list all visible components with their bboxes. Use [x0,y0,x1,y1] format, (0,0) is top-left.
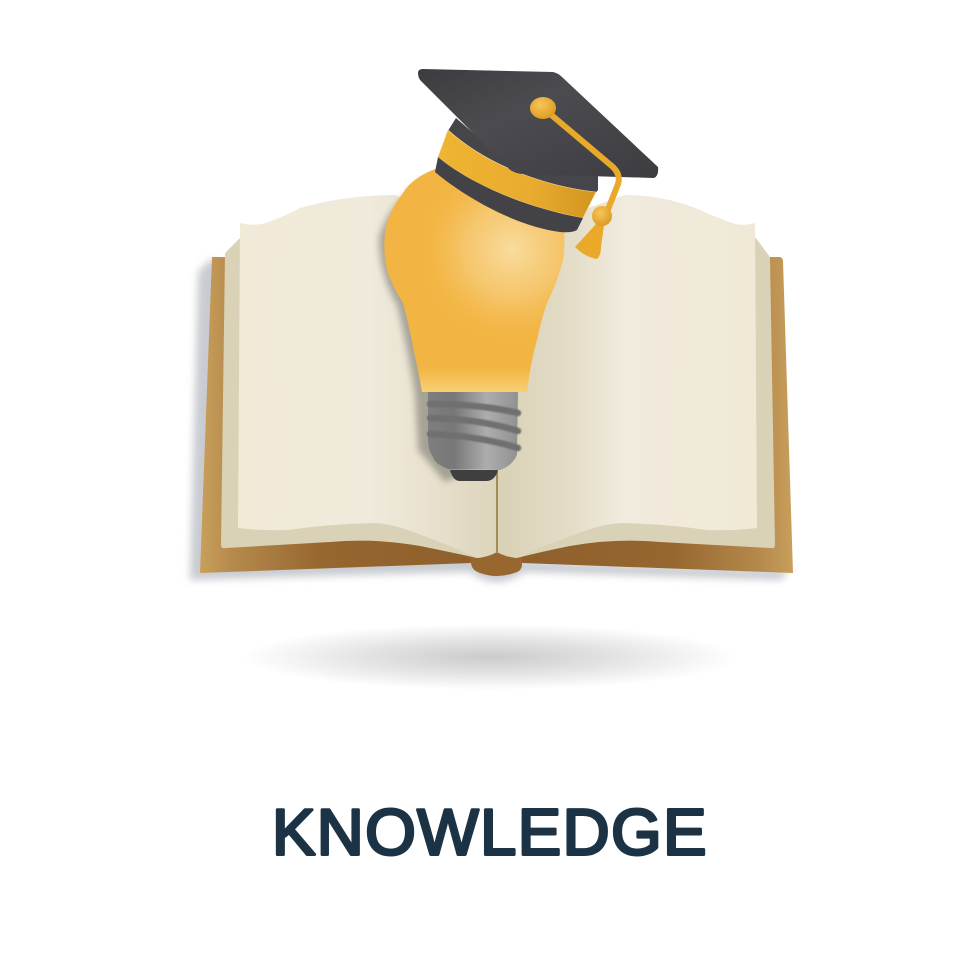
left page edge [221,225,497,558]
right cover [514,257,793,573]
icon: graduation cap [418,69,658,259]
left page [238,195,497,558]
icon: screw base [428,392,518,481]
tassel cord [549,113,619,212]
tassel knot [592,206,612,226]
tassel [575,223,604,259]
left cover [200,257,480,573]
screw threads [430,404,518,448]
right page [497,195,757,558]
floor shadow [242,624,738,690]
title: KNOWLEDGE [272,796,708,868]
open book [190,195,793,582]
right page edge [497,225,775,558]
spine [471,545,522,576]
cord button [530,97,556,119]
glass lower rim [418,368,531,392]
gutter line [496,470,498,552]
board [418,69,658,178]
book drop shadow [190,258,790,582]
dark band [435,157,583,232]
light bulb with graduation cap [379,69,658,482]
screw cap body [428,392,518,470]
glass body [384,169,564,392]
bulb shadow [379,178,470,482]
glass highlight [384,169,564,392]
bulb contact [450,470,498,481]
bulb glass [384,169,564,392]
cap crown [446,118,598,200]
gold band [438,130,596,218]
